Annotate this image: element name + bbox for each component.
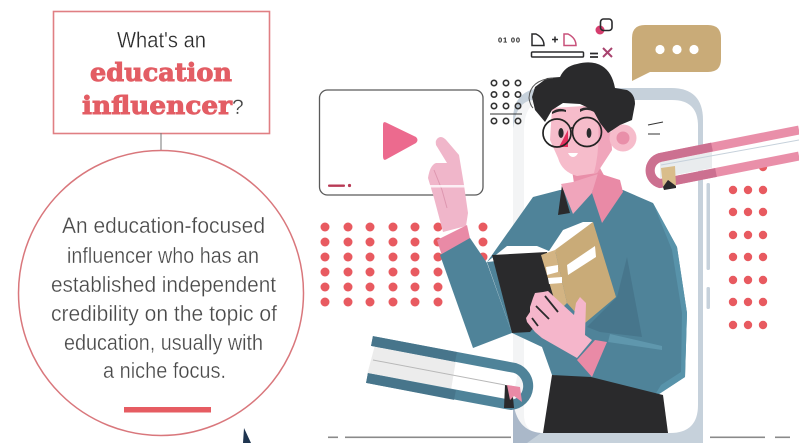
eyes [558,128,564,138]
definition circle: established independent [51,272,276,297]
title box: ? [232,96,244,119]
sleeve fold [608,334,662,350]
face [550,105,612,176]
definition circle [18,150,304,436]
math doodle: 01 00 [498,36,520,44]
definition circle: credibility on the topic of [51,301,278,326]
jacket shading [587,257,642,337]
eyebrows [552,107,600,117]
left collar [561,174,598,214]
jacket rim [653,203,687,398]
skirt [543,375,668,433]
neck [572,168,612,190]
red dot grid: left [320,222,488,306]
icon: speech bubble [632,25,721,81]
definition circle: education, usually with [64,330,263,355]
raised arm [440,238,512,348]
hair [532,62,635,133]
definition circle: influencer who has an [67,243,259,268]
glasses [543,118,602,147]
torso and sleeve [487,190,687,398]
title box: What's an [117,28,206,52]
teacher figure [440,62,687,433]
ground lines [328,436,790,438]
teal book [367,341,528,408]
title box: education [90,58,232,87]
title box: influencer [82,91,233,120]
math doodle [498,19,612,57]
raised hand [427,137,471,256]
ring dot pattern [490,80,522,124]
dash marks [648,122,663,134]
red dot grid: right [729,163,767,329]
definition circle: An education-focused [62,213,265,238]
open book [487,222,616,333]
ear [610,124,636,152]
lower hand [526,291,592,358]
video player [320,90,483,195]
dark spike at bottom [243,428,251,443]
cuff [577,340,607,377]
mouth [568,153,578,157]
collar inner [558,185,570,215]
connector line [160,133,162,151]
phone frame [513,88,710,443]
definition circle: a niche focus. [103,358,226,383]
face shadow [594,122,612,173]
nose [559,130,568,147]
title box [54,12,270,134]
right collar [592,173,623,223]
hair strand [529,78,553,108]
pink book [650,130,799,190]
